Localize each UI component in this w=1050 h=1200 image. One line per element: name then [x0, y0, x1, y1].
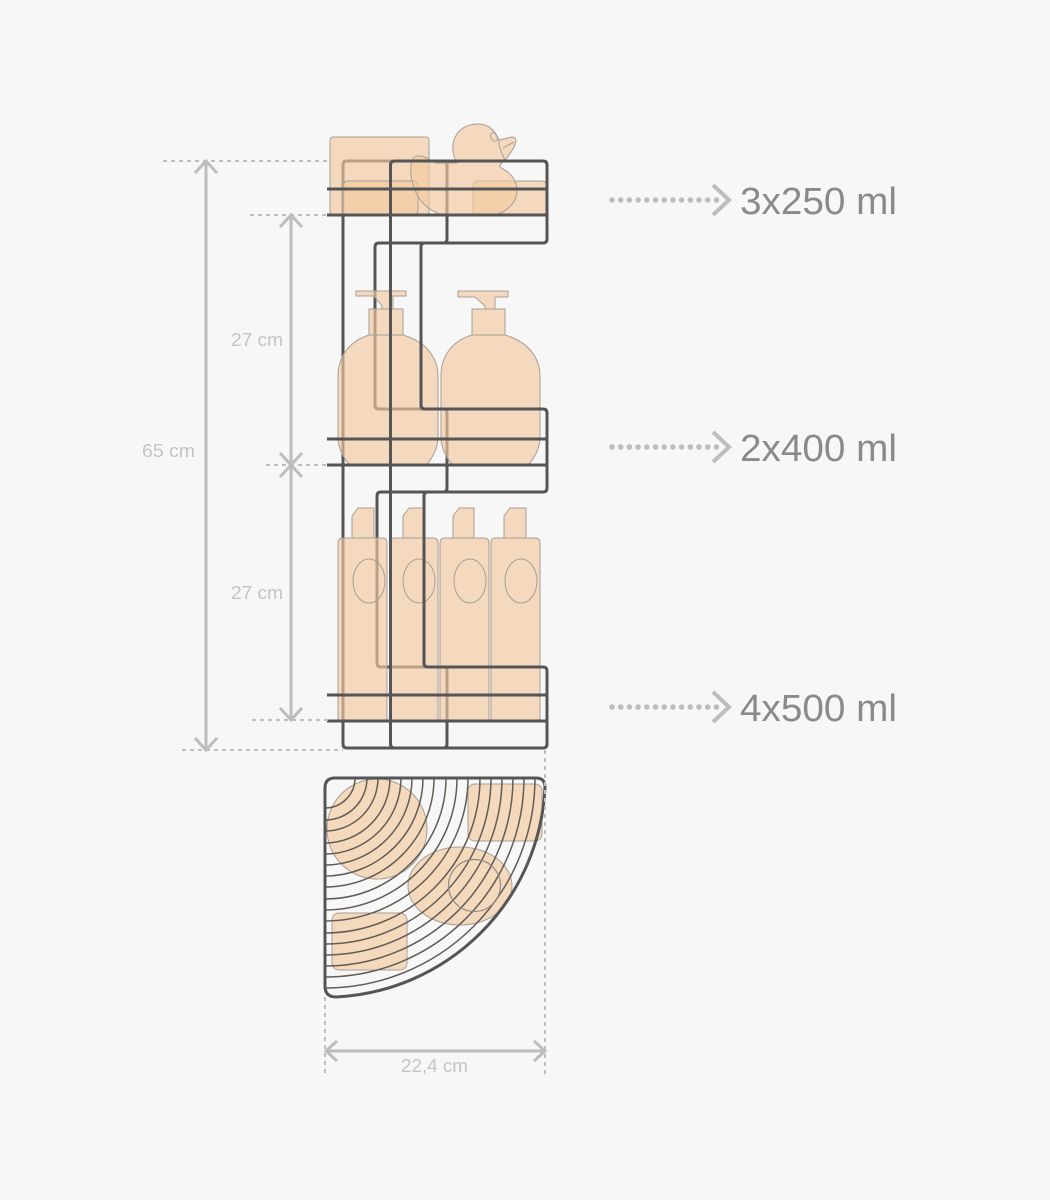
- products: bottom shelf: [338, 508, 540, 721]
- item: round sponge: [327, 779, 427, 879]
- item: square sponge top: [468, 784, 542, 841]
- icon: duck beak line: [499, 140, 514, 160]
- item: small box left: [343, 181, 418, 215]
- item: tall bottle 4: [491, 508, 540, 721]
- callout: 4x500 ml: [612, 688, 897, 730]
- item: tall bottle 2: [390, 508, 438, 721]
- dimension: lower shelf spacing 27 cm: [231, 465, 330, 720]
- dimension: upper shelf spacing 27 cm: 27 cm: [231, 330, 283, 350]
- arrow: [612, 185, 729, 215]
- icon: rubber duck: [411, 124, 517, 215]
- item: small box right: [473, 181, 547, 215]
- item: inner circle on oval sponge: [448, 860, 500, 912]
- label: 3x250 ml: [740, 181, 897, 223]
- dimension: total height 65 cm: [142, 161, 343, 750]
- label: 4x500 ml: [740, 688, 897, 730]
- top-view basket: [325, 778, 545, 997]
- rear wire frame of the shelf: [343, 161, 447, 748]
- item: oval sponge: [408, 847, 512, 925]
- front wire frame of the shelf: [390, 161, 547, 748]
- products: top shelf: [330, 124, 547, 215]
- dimension: lower shelf spacing 27 cm: 27 cm: [231, 583, 283, 603]
- basket outer frame: [325, 778, 545, 997]
- dimension: total height 65 cm: 65 cm: [142, 441, 195, 461]
- item: square sponge bottom: [332, 913, 407, 970]
- dimension: width 22,4 cm: [325, 750, 545, 1077]
- callout: 3x250 ml: [612, 181, 897, 223]
- callout: 2x400 ml: [612, 428, 897, 470]
- item: soap box: [330, 137, 429, 215]
- arrow: [612, 692, 729, 722]
- shelf rails: [327, 189, 547, 721]
- item: tall bottle 1: [338, 508, 387, 721]
- dimension: upper shelf spacing 27 cm: [231, 215, 330, 465]
- dimension: width 22,4 cm: 22,4 cm: [401, 1056, 468, 1076]
- icon: duck eye: [489, 132, 499, 142]
- label: 2x400 ml: [740, 428, 897, 470]
- products: middle shelf: [338, 291, 540, 465]
- item: tall bottle 3: [440, 508, 489, 721]
- basket arcs: [325, 778, 535, 988]
- top-view items: [327, 779, 542, 970]
- item: pump bottle 1: [338, 291, 438, 465]
- item: pump bottle 2: [441, 291, 540, 465]
- arrow: [612, 432, 729, 462]
